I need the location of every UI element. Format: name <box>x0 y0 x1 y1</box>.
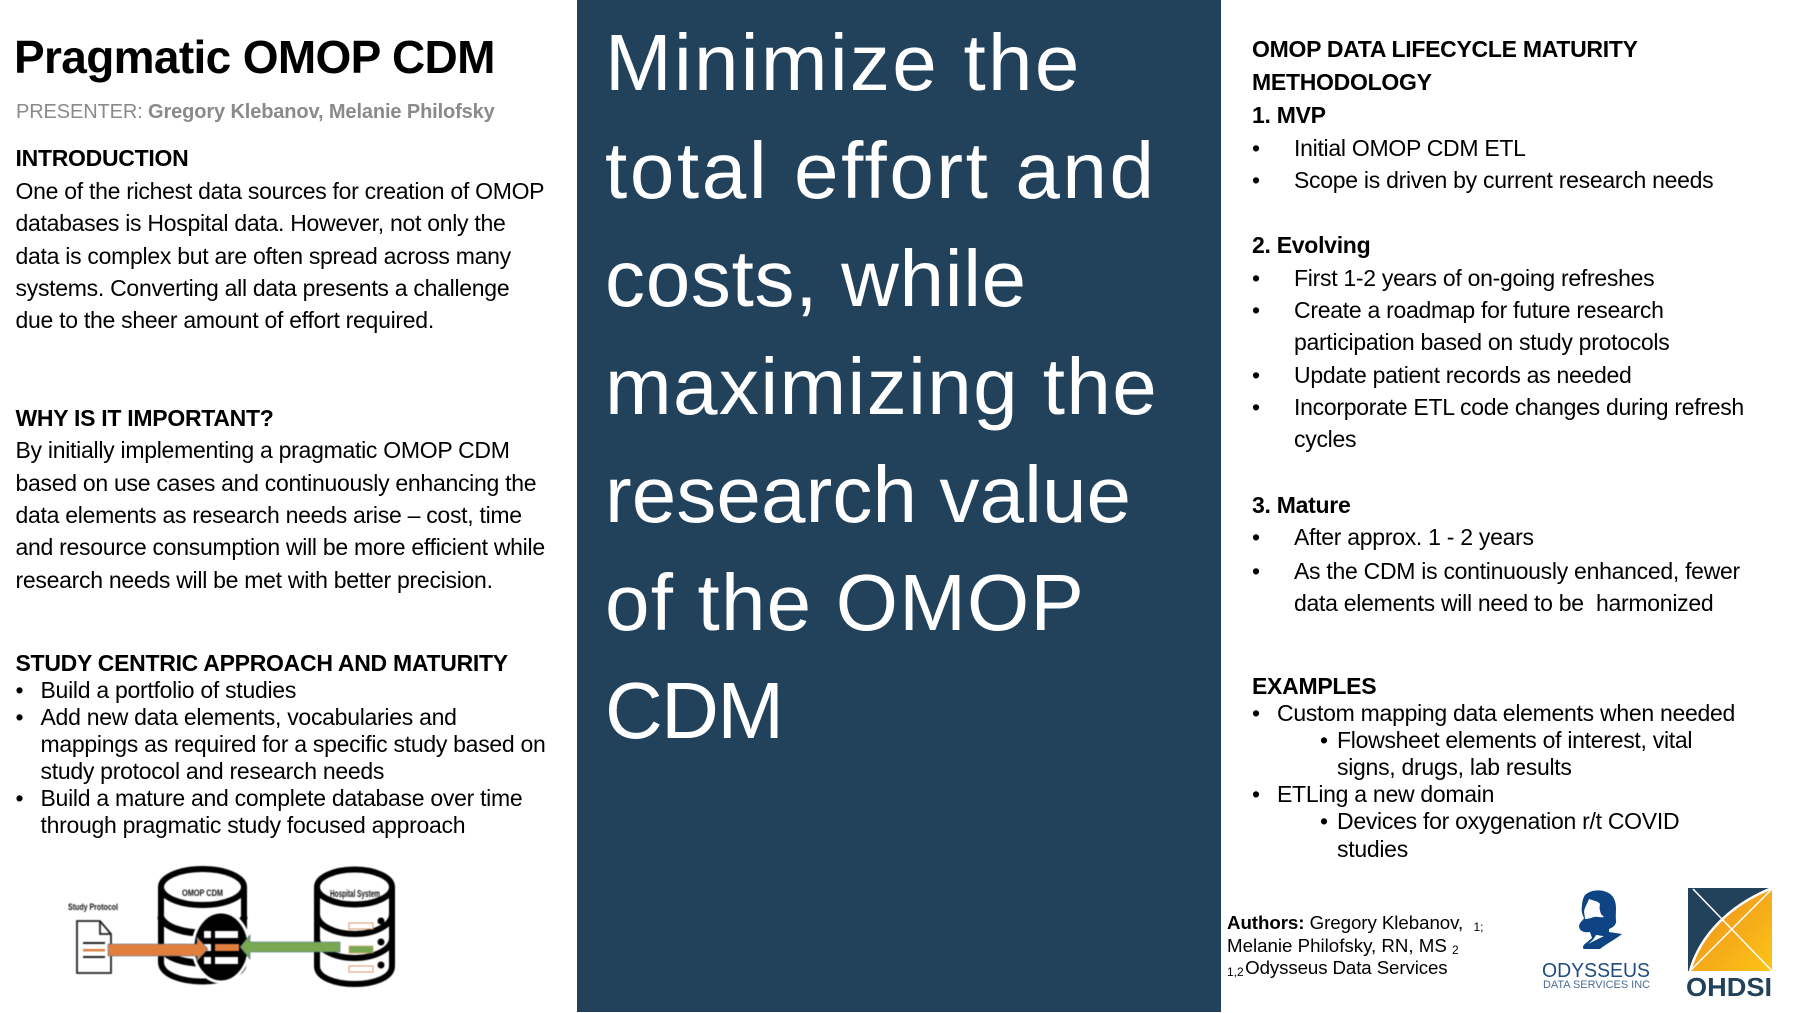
text block: study centric approach: • <box>16 704 23 730</box>
text block: lifecycle maturity methodology: • <box>1252 394 1260 420</box>
text block: lifecycle maturity methodology: Scope is driven by current research needs <box>1294 167 1713 193</box>
text block: examples: Flowsheet elements of interest, vital <box>1337 727 1692 753</box>
text block: lifecycle maturity methodology: • <box>1252 558 1260 584</box>
key message text: total effort and <box>605 126 1157 215</box>
icon: study protocol document <box>68 902 118 973</box>
text block: study centric approach: Add new data elements, vocabularies and <box>40 704 457 730</box>
text block: examples: studies <box>1337 836 1408 862</box>
text block: why is it important: based on use cases and continuously enhancing the <box>16 470 536 496</box>
text block: study centric approach: • <box>16 785 23 811</box>
panel: central key message <box>577 0 1221 1012</box>
text block: authors <box>1227 912 1483 979</box>
text block: lifecycle maturity methodology: 3. Mature <box>1252 492 1350 518</box>
text block: lifecycle maturity methodology: • <box>1252 167 1260 193</box>
text block: examples: Devices for oxygenation r/t COVID <box>1337 808 1679 834</box>
text block: examples <box>1252 673 1735 862</box>
key message text: costs, while <box>605 234 1027 323</box>
text block: study centric approach: • <box>16 677 23 703</box>
text block: authors: Melanie Philofsky, RN, MS 2 <box>1227 935 1459 957</box>
presenter line: PRESENTER: Gregory Klebanov, Melanie Philofsky <box>16 101 495 123</box>
text block: lifecycle maturity methodology: participation based on study protocols <box>1294 329 1670 355</box>
text block: why is it important <box>16 405 545 593</box>
logo: Odysseus Data Services <box>1542 890 1650 991</box>
title: Pragmatic OMOP CDM <box>14 31 495 83</box>
text block: introduction <box>16 145 544 333</box>
text block: study centric approach: through pragmatic study focused approach <box>40 812 465 838</box>
text block: lifecycle maturity methodology: • <box>1252 135 1260 161</box>
key message text: of the OMOP <box>605 558 1085 647</box>
text block: introduction: INTRODUCTION <box>16 145 188 171</box>
text block: introduction: due to the sheer amount of effort required. <box>16 307 434 333</box>
text block: lifecycle maturity methodology: 1. MVP <box>1252 102 1326 128</box>
text block: lifecycle maturity methodology: Create a roadmap for future research <box>1294 297 1664 323</box>
text block: why is it important: By initially implementing a pragmatic OMOP CDM <box>16 437 510 463</box>
text block: lifecycle maturity methodology: • <box>1252 362 1260 388</box>
text block: lifecycle maturity methodology: cycles <box>1294 426 1356 452</box>
text block: lifecycle maturity methodology: After approx. 1 - 2 years <box>1294 524 1534 550</box>
icon: hospital system database: Hospital System <box>330 889 380 900</box>
text block: lifecycle maturity methodology: Incorporate ETL code changes during refresh <box>1294 394 1744 420</box>
text block: lifecycle maturity methodology: • <box>1252 524 1260 550</box>
logo: OHDSI <box>1686 888 1772 1000</box>
key message text <box>605 18 1158 755</box>
text block: lifecycle maturity methodology: • <box>1252 297 1260 323</box>
key message text: Minimize the <box>605 18 1082 107</box>
text block: lifecycle maturity methodology: 2. Evolving <box>1252 232 1370 258</box>
text block: why is it important: data elements as research needs arise – cost, time <box>16 502 522 528</box>
text block: why is it important: and resource consumption will be more efficient while <box>16 534 545 560</box>
text block: lifecycle maturity methodology: data elements will need to be harmonized <box>1294 590 1713 616</box>
text block: lifecycle maturity methodology: • <box>1252 265 1260 291</box>
arrow: green, hospital to CDM <box>240 935 340 959</box>
logo: Odysseus Data Services: ODYSSEUS <box>1542 960 1650 982</box>
text block: examples: • <box>1320 808 1328 834</box>
text block: introduction: databases is Hospital data. However, not only the <box>16 210 506 236</box>
text block: lifecycle maturity methodology: Update patient records as needed <box>1294 362 1632 388</box>
icon: study protocol document: Study Protocol <box>68 902 118 913</box>
key message text: maximizing the <box>605 342 1158 431</box>
text block: introduction: One of the richest data sources for creation of OMOP <box>16 178 544 204</box>
text block: examples: EXAMPLES <box>1252 673 1376 699</box>
arrow: orange, protocol to CDM <box>108 937 208 961</box>
text block: study centric approach: STUDY CENTRIC APPROACH AND MATURITY <box>16 650 508 676</box>
text block: introduction: data is complex but are often spread across many <box>16 243 511 269</box>
text block: authors: 1,2 Odysseus Data Services <box>1227 957 1448 979</box>
text block: study centric approach: Build a portfolio of studies <box>40 677 296 703</box>
diagram: study protocol to OMOP CDM from hospital system <box>68 865 396 988</box>
text block: authors: Authors: Gregory Klebanov, 1; <box>1227 912 1483 934</box>
key message text: CDM <box>605 666 782 755</box>
text block: why is it important: research needs will be met with better precision. <box>16 567 493 593</box>
text block: examples: Custom mapping data elements when needed <box>1277 700 1735 726</box>
text block: lifecycle maturity methodology: METHODOLOGY <box>1252 69 1432 95</box>
icon: OMOP CDM database: OMOP CDM <box>182 888 223 899</box>
text block: study centric approach <box>16 650 546 838</box>
text block: lifecycle maturity methodology: As the CDM is continuously enhanced, fewer <box>1294 558 1740 584</box>
text block: lifecycle maturity methodology: First 1-2 years of on-going refreshes <box>1294 265 1654 291</box>
text block: examples: ETLing a new domain <box>1277 781 1494 807</box>
text block: examples: • <box>1320 727 1328 753</box>
text block: lifecycle maturity methodology: OMOP DATA LIFECYCLE MATURITY <box>1252 36 1638 62</box>
text block: examples: • <box>1252 700 1260 726</box>
text block: study centric approach: study protocol and research needs <box>40 758 384 784</box>
text block: study centric approach: Build a mature and complete database over time <box>40 785 522 811</box>
text block: lifecycle maturity methodology: Initial OMOP CDM ETL <box>1294 135 1526 161</box>
icon: hospital system database <box>317 870 392 984</box>
text block: study centric approach: mappings as required for a specific study based on <box>40 731 546 757</box>
text block: lifecycle maturity methodology <box>1252 36 1744 616</box>
text block: introduction: systems. Converting all data presents a challenge <box>16 275 509 301</box>
text block: examples: signs, drugs, lab results <box>1337 754 1572 780</box>
text block: why is it important: WHY IS IT IMPORTANT? <box>16 405 274 431</box>
key message text: research value <box>605 450 1131 539</box>
text block: examples: • <box>1252 781 1260 807</box>
icon: OMOP CDM database <box>161 869 249 982</box>
logo: Odysseus Data Services: DATA SERVICES INC <box>1543 979 1650 991</box>
